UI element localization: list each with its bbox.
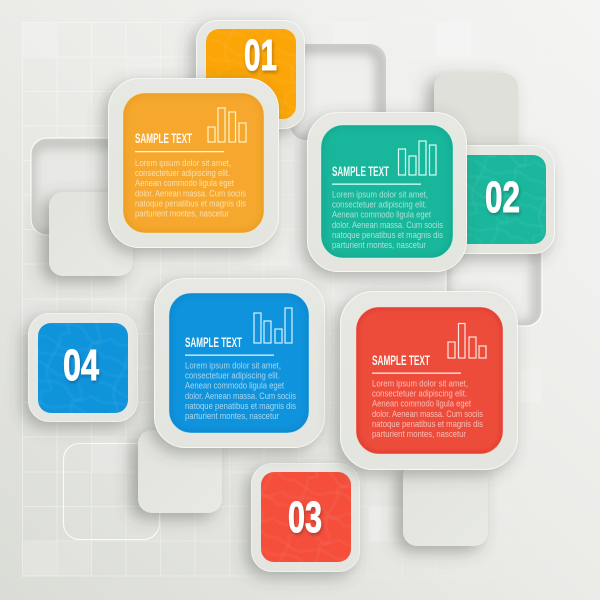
bar chart icon — [254, 308, 292, 343]
body text: parturient montes, nascetur — [135, 208, 229, 218]
body text: dolor. Aenean massa. Cum sociis — [135, 188, 247, 198]
body text: consectetuer adipiscing elit. — [135, 168, 230, 178]
number 02: 02 — [485, 173, 520, 222]
body text: consectetuer adipiscing elit. — [185, 371, 280, 381]
body text: parturient montes, nascetur — [185, 411, 279, 421]
recessed outline: upper left — [30, 138, 108, 236]
body text: consectetuer adipiscing elit. — [372, 389, 467, 399]
body text: Aenean commodo ligula eget — [185, 381, 284, 391]
body text — [332, 190, 444, 250]
number tile 01 — [196, 20, 304, 128]
bar chart icon — [448, 324, 486, 358]
recessed outline: right — [446, 252, 542, 326]
body text: natoque penatibus et magnis dis — [372, 419, 484, 429]
body text: Aenean commodo ligula eget — [372, 399, 471, 409]
grey tile: lower right — [403, 462, 488, 546]
heading: SAMPLE TEXT — [135, 131, 192, 146]
panel: blue — [154, 278, 324, 448]
number 01: 01 — [244, 31, 277, 80]
bar chart icon — [208, 108, 246, 142]
panel: orange — [108, 78, 278, 248]
recessed outline: top centre — [286, 44, 386, 143]
body text: natoque penatibus et magnis dis — [332, 230, 444, 240]
body text: Lorem ipsum dolor sit amet, — [372, 378, 468, 388]
body text — [185, 360, 297, 421]
grey tile: lower centre — [138, 430, 222, 513]
body text — [372, 378, 484, 439]
outline: lower left — [64, 444, 160, 540]
body text: Aenean commodo ligula eget — [332, 210, 431, 220]
grey tile: top right — [434, 73, 518, 163]
body text: Lorem ipsum dolor sit amet, — [332, 190, 428, 200]
bar chart icon — [398, 141, 436, 175]
body text: parturient montes, nascetur — [332, 240, 426, 250]
body text: consectetuer adipiscing elit. — [332, 200, 427, 210]
body text: natoque penatibus et magnis dis — [185, 401, 297, 411]
number tile 02 — [440, 146, 554, 254]
panel: red — [340, 292, 518, 470]
body text: natoque penatibus et magnis dis — [135, 198, 247, 208]
body text: dolor. Aenean massa. Cum sociis — [372, 409, 484, 419]
number 04: 04 — [63, 341, 99, 390]
heading: SAMPLE TEXT — [332, 164, 389, 179]
grey tile: upper left — [49, 192, 133, 276]
number 03: 03 — [288, 493, 322, 542]
number tile 03 — [252, 464, 360, 572]
body text: Lorem ipsum dolor sit amet, — [135, 158, 231, 168]
body text: parturient montes, nascetur — [372, 429, 466, 439]
number tile 04 — [28, 314, 138, 422]
heading: SAMPLE TEXT — [185, 335, 242, 350]
body text: Lorem ipsum dolor sit amet, — [185, 360, 281, 370]
panel: green — [308, 112, 466, 272]
body text: dolor. Aenean massa. Cum sociis — [332, 220, 444, 230]
body text — [135, 158, 247, 218]
heading: SAMPLE TEXT — [372, 353, 430, 368]
body text: dolor. Aenean massa. Cum sociis — [185, 391, 297, 401]
body text: Aenean commodo ligula eget — [135, 178, 234, 188]
